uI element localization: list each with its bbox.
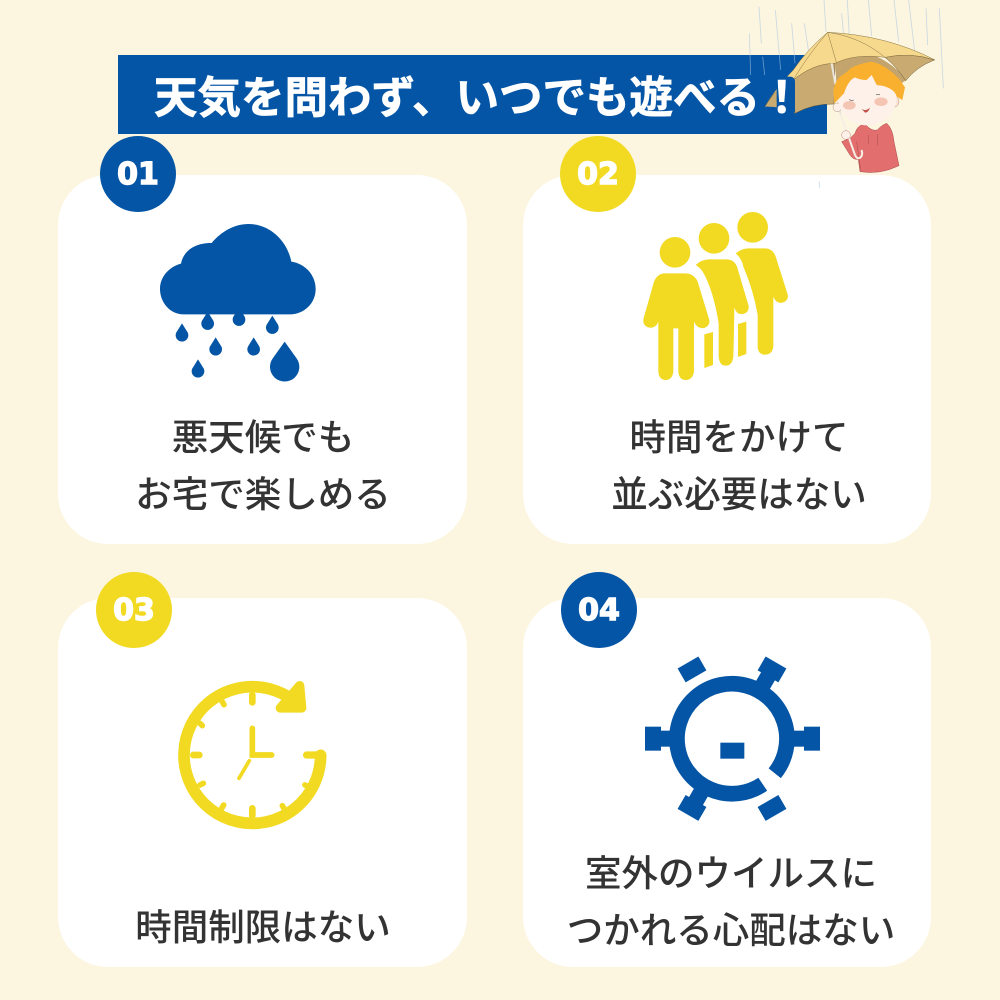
text: card 1 <box>135 417 391 514</box>
badge 01 <box>100 136 176 212</box>
badge 04: 04 <box>578 593 620 628</box>
badge 03 <box>96 572 172 648</box>
illustration: child with umbrella in the rain <box>749 0 944 188</box>
panel: card 3 <box>58 598 467 967</box>
title banner <box>118 55 827 134</box>
text: card 2 <box>611 417 867 514</box>
text: card 1: お宅で楽しめる <box>135 474 391 514</box>
icon: people in a queue <box>643 212 788 380</box>
badge 02 <box>560 136 636 212</box>
panel: card 2 <box>523 175 931 544</box>
title text: 天気を問わず、いつでも遊べる！ <box>154 75 803 123</box>
badge 01: 01 <box>117 157 159 192</box>
badge 02: 02 <box>577 157 619 192</box>
panel: card 1 <box>58 175 467 544</box>
badge 04 <box>561 572 637 648</box>
text: card 4: 室外のウイルスに <box>585 853 877 894</box>
icon: clock with arrow <box>178 680 326 830</box>
panel: card 4 <box>523 598 931 967</box>
text: card 2: 時間をかけて <box>630 417 848 458</box>
badge 03: 03 <box>113 593 155 628</box>
icon: virus <box>645 656 820 821</box>
text: card 3: 時間制限はない <box>135 907 391 948</box>
text: card 1: 悪天候でも <box>172 417 354 458</box>
text: card 2: 並ぶ必要はない <box>611 474 867 514</box>
icon: rain cloud <box>160 224 316 382</box>
text: card 4 <box>567 853 895 950</box>
text: card 4: つかれる心配はない <box>567 910 895 950</box>
